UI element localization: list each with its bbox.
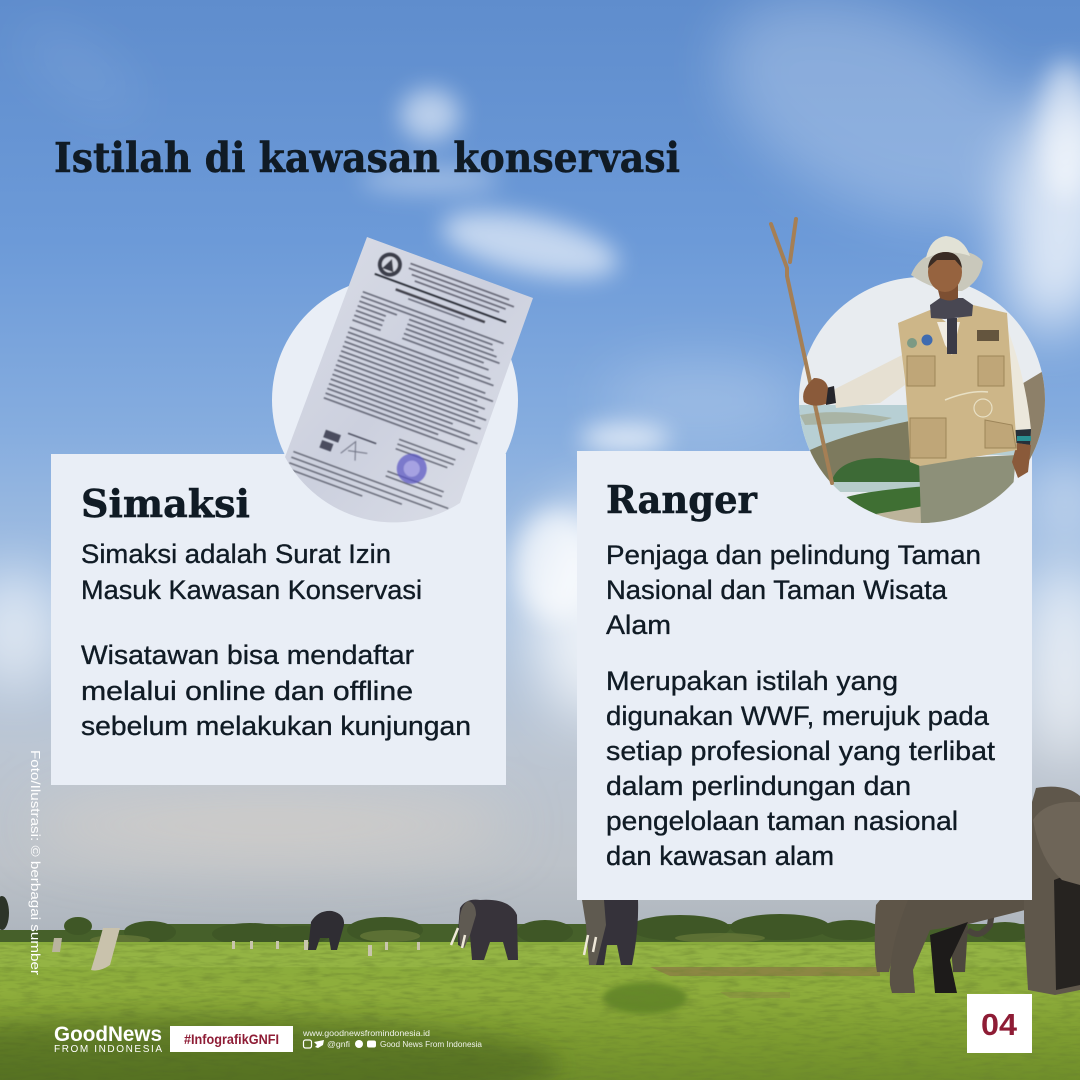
photo: Simaksi permit document [285,237,533,522]
panel: Ranger [577,219,1045,900]
text: Ranger description: pengelolaan taman nasional [606,806,958,836]
hashtag badge [170,1026,293,1052]
distant stumps and posts [52,928,420,970]
footer contact: www.goodnewsfromindonesia.id [302,1028,430,1038]
footer contact [302,1028,483,1049]
background: grass field [0,942,1080,1080]
photo: ranger in circle [771,219,1045,523]
page number: 04 [981,1007,1018,1042]
circle backdrop: Simaksi [272,277,518,523]
elephant: tusked middle [451,900,518,960]
text: Simaksi registration: Wisatawan bisa mendaftar [81,640,414,670]
heading: Simaksi: Simaksi [81,481,250,526]
text: Simaksi definition [81,539,422,605]
text: Ranger description [606,666,996,871]
text: Ranger description: dan kawasan alam [606,841,834,871]
elephant: centre behind panel [582,900,638,965]
text: Ranger definition: Nasional dan Taman Wisata [606,575,947,605]
background: tree line [0,896,1080,960]
text: Simaksi definition: Simaksi adalah Surat Izin [81,539,391,569]
text: Ranger definition [606,540,981,640]
photo credit: Foto/Ilustrasi: © berbagai sumber [28,750,43,976]
elephant: small far left [308,911,344,950]
text: Simaksi definition: Masuk Kawasan Konservasi [81,575,422,605]
icons: social media [304,1040,376,1048]
text: Ranger definition: Alam [606,610,671,640]
footer contact: Good News From Indonesia [380,1040,483,1049]
footer logo: GoodNews [54,1023,162,1046]
elephant group: right [875,787,1080,995]
footer logo: FROM INDONESIA [54,1044,162,1055]
text: Ranger description: setiap profesional yang terlibat [606,736,996,766]
text: Ranger description: dalam perlindungan dan [606,771,911,801]
text: Ranger description: digunakan WWF, merujuk pada [606,701,989,731]
hashtag badge: #InfografikGNFI [184,1031,279,1047]
title: Istilah di kawasan konservasi [54,134,680,182]
page number [967,994,1032,1053]
ranger staff [771,219,832,483]
panel background: Simaksi [51,454,506,785]
ranger figure [803,236,1031,523]
text: Ranger description: Merupakan istilah yang [606,666,898,696]
panel: Simaksi [51,230,540,785]
heading: Ranger: Ranger [606,477,758,522]
text: Ranger definition: Penjaga dan pelindung Taman [606,540,981,570]
landscape circle [799,277,1045,523]
text: Simaksi registration: sebelum melakukan kunjungan [81,711,471,741]
text: Simaksi registration [81,640,471,741]
footer contact: @gnfi [327,1040,350,1049]
panel background: Ranger [577,451,1032,900]
text: Simaksi registration: melalui online dan offline [81,676,413,706]
